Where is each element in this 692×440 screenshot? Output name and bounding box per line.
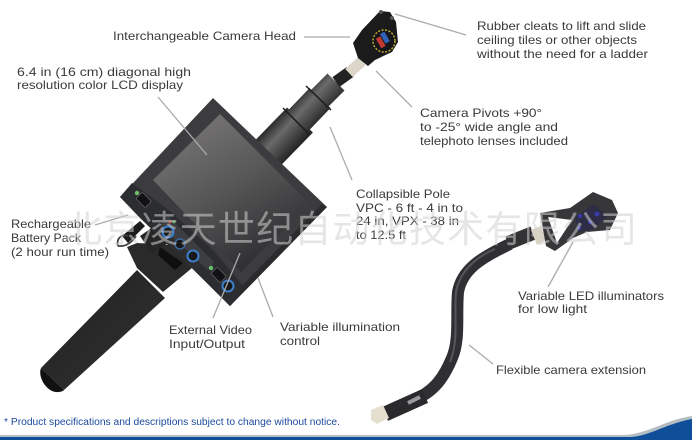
label: battery pack: (2 hour run time) — [11, 245, 109, 259]
knob 2 — [175, 239, 185, 249]
label: LCD display — [17, 65, 191, 92]
label: illumination control — [280, 320, 400, 348]
label: LED illuminators: for low light — [518, 302, 588, 316]
label: camera head: Interchangeable Camera Head — [113, 29, 296, 43]
label: rubber cleats: ceiling tiles or other objects — [477, 33, 637, 47]
label: rubber cleats: without the need for a ladder — [476, 47, 648, 61]
knob 1 — [162, 226, 174, 238]
telescoping pole — [263, 61, 362, 158]
label: collapsible pole — [356, 187, 463, 242]
label: camera pivots — [420, 106, 568, 148]
interchangeable camera head — [353, 10, 398, 66]
label: LCD display: 6.4 in (16 cm) diagonal high — [17, 65, 191, 79]
label: camera pivots: telephoto lenses included — [420, 134, 568, 148]
label: illumination control: Variable illumination — [280, 320, 400, 334]
label: illumination control: control — [280, 334, 320, 348]
label: LED illuminators — [518, 289, 664, 316]
label: battery pack: Rechargeable — [11, 217, 91, 231]
label: collapsible pole: 24 in, VPX - 38 in — [356, 214, 459, 228]
label: rubber cleats — [476, 19, 648, 61]
flexible gooseneck — [371, 226, 546, 424]
label: camera pivots: to -25° wide angle and — [420, 120, 558, 134]
label: camera pivots: Camera Pivots +90° — [420, 106, 542, 120]
label: collapsible pole: Collapsible Pole — [356, 187, 450, 201]
status button top — [136, 192, 151, 208]
label: external video: External Video — [169, 323, 252, 337]
label: battery pack — [11, 217, 109, 259]
LED camera tip — [540, 192, 618, 251]
label: external video: Input/Output — [169, 337, 246, 351]
battery pack connector — [118, 221, 172, 254]
label: LCD display: resolution color LCD display — [17, 78, 183, 92]
LCD display body — [120, 98, 327, 306]
label: external video — [169, 323, 252, 351]
control panel — [120, 183, 245, 306]
footer band — [0, 416, 692, 440]
status button bottom — [211, 267, 226, 283]
label: collapsible pole: VPC - 6 ft - 4 in to — [356, 201, 463, 215]
knob 4 — [222, 280, 234, 292]
label: rubber cleats: Rubber cleats to lift and slide — [477, 19, 646, 33]
leader lines — [95, 14, 573, 364]
handle grip — [40, 243, 192, 392]
label: battery pack: Battery Pack — [11, 231, 82, 245]
label: flexible extension: Flexible camera extension — [496, 363, 646, 377]
label: LED illuminators: Variable LED illuminators — [518, 289, 664, 303]
footnote: * Product specifications and descriptions subject to change without notice. — [4, 417, 340, 428]
label: collapsible pole: to 12.5 ft — [356, 228, 407, 242]
knob 3 — [188, 250, 198, 262]
watermark: 北京凌天世纪自动化技术有限公司 — [65, 209, 637, 250]
